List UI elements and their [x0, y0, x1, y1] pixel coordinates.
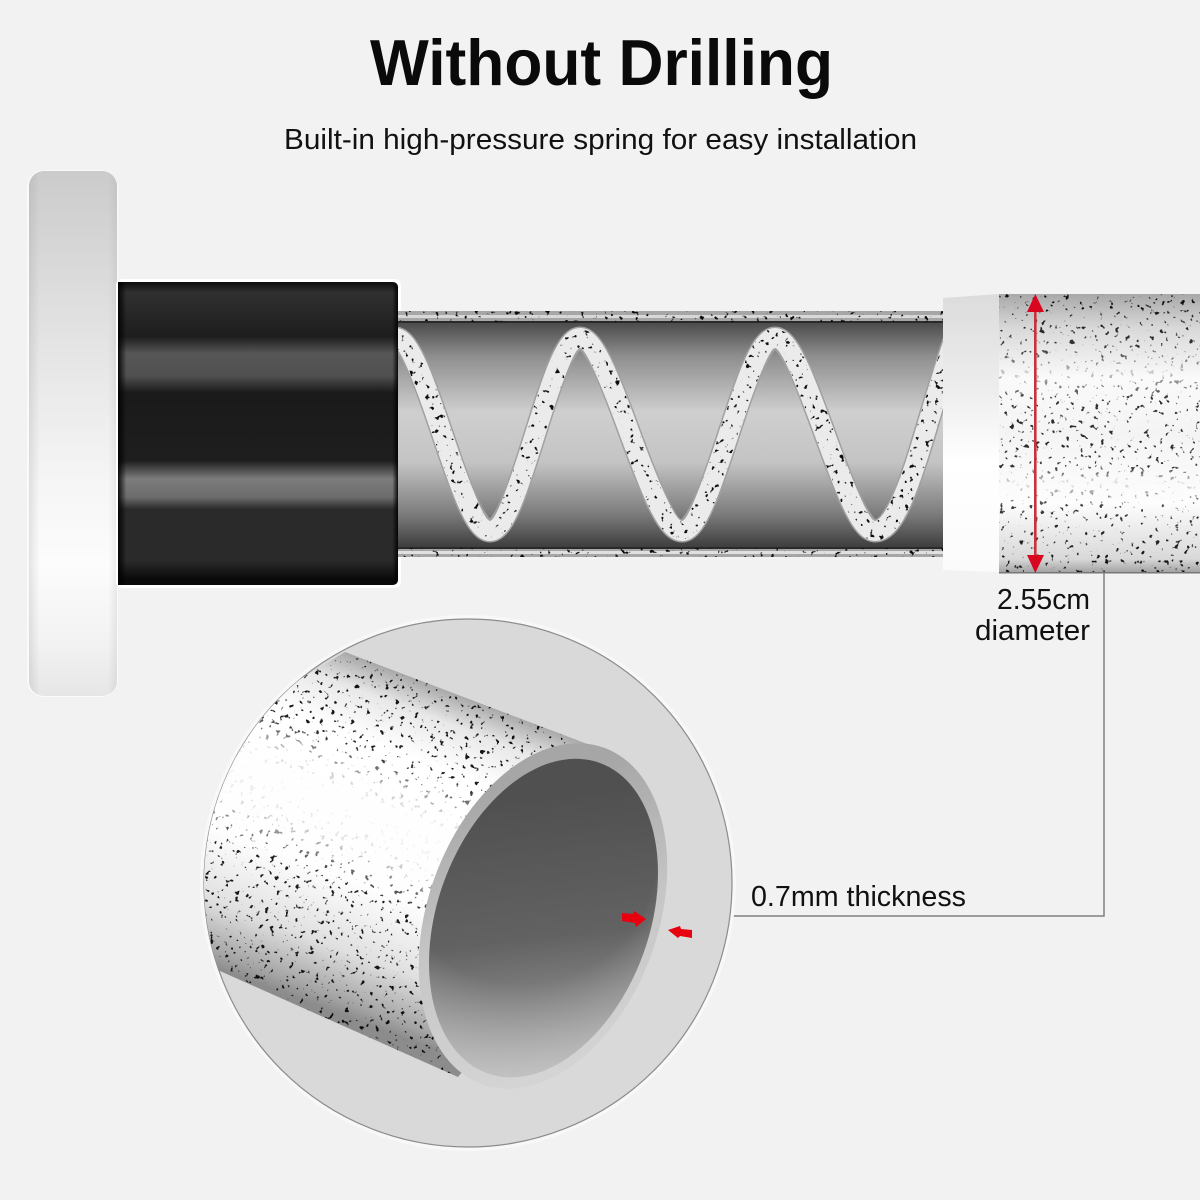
diameter arrow: [1027, 294, 1044, 573]
diameter label: diameter: [975, 615, 1091, 647]
tube bore: [429, 758, 658, 1078]
diameter label: [975, 584, 1091, 647]
tube wall and interior: [398, 308, 943, 558]
diameter label: 2.55cm: [997, 584, 1090, 616]
thickness label: 0.7mm thickness: [751, 881, 966, 913]
subtitle: Built-in high-pressure spring for easy installation: [284, 124, 917, 156]
magnified detail circle: [203, 618, 734, 1148]
cut tube body: [204, 652, 588, 1077]
spring coil: [390, 320, 955, 550]
white sleeve: [943, 294, 999, 572]
inner tube cutaway with spring: [390, 308, 955, 558]
title: Without Drilling: [370, 26, 833, 99]
speckled outer tube: [999, 294, 1200, 574]
black collar: [116, 279, 401, 588]
tube wall rim: [418, 744, 668, 1073]
thickness arrows: [622, 911, 692, 938]
wall plate: white end cap disc: [27, 170, 118, 697]
leader line: [731, 573, 1104, 916]
